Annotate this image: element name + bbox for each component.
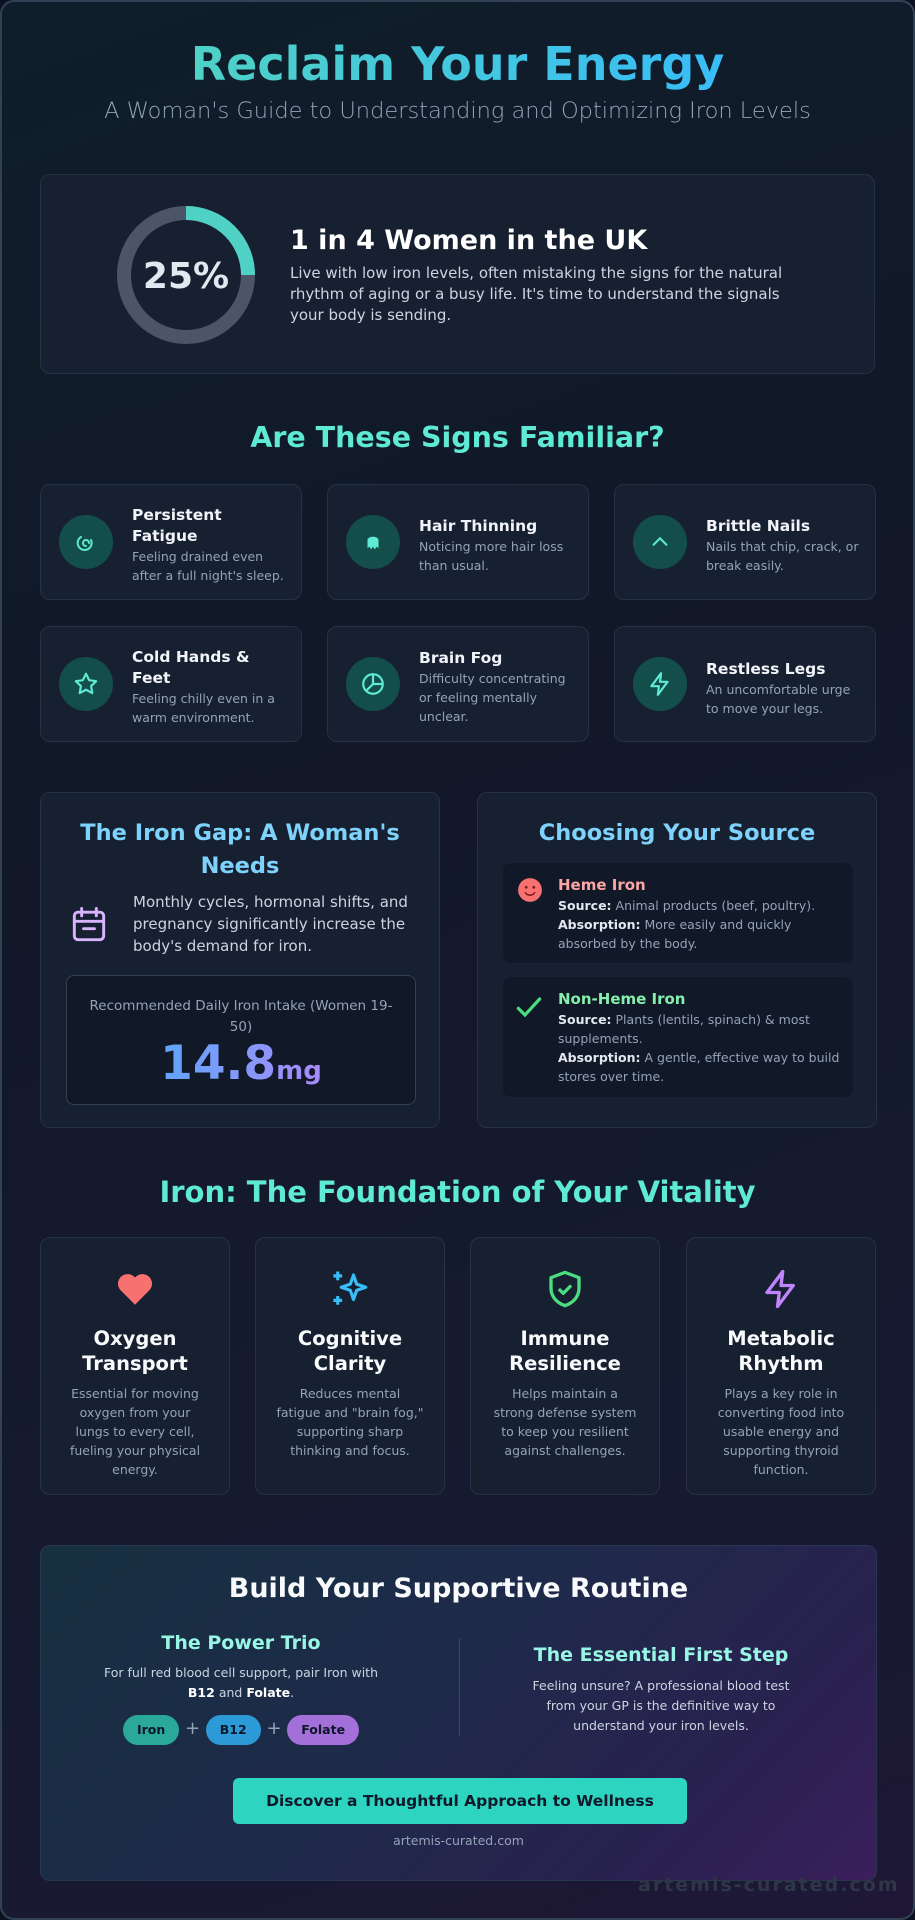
card: immune: Helps maintain a strong defense system to keep you resilient against challenges. xyxy=(494,1386,636,1458)
heme iron: Heme Iron xyxy=(558,876,646,894)
heme iron: Absorption: More easily and quickly absorbed by the body. xyxy=(558,917,791,951)
card: oxygen xyxy=(40,1237,230,1495)
intake box: 14.8mg xyxy=(160,1036,322,1091)
heading: Choosing Your Source xyxy=(539,820,815,846)
stat heading: 1 in 4 Women in the UK xyxy=(290,225,647,256)
sign: legs xyxy=(614,626,876,742)
card: cognitive: Reduces mental fatigue and "brain fog," supporting sharp thinking and focus. xyxy=(276,1386,424,1458)
heading: The Iron Gap: A Woman's Needs xyxy=(80,820,400,879)
pills: B12 xyxy=(220,1722,247,1737)
sign: hair: Hair Thinning xyxy=(419,517,537,535)
icon: bolt xyxy=(765,1270,795,1308)
pills: Iron xyxy=(137,1722,165,1737)
sign: cold: Cold Hands & Feet xyxy=(132,648,250,687)
sign: nails xyxy=(614,484,876,600)
power trio: The Power Trio xyxy=(161,1632,321,1654)
icon: calendar xyxy=(72,907,106,942)
text: Monthly cycles, hormonal shifts, and pregnancy significantly increase the body's demand for iron. xyxy=(133,893,408,955)
essential first step: The Essential First Step xyxy=(534,1644,788,1666)
donut chart xyxy=(117,206,255,344)
sign: cold: Feeling chilly even in a warm environment. xyxy=(132,691,275,725)
sign: fatigue: Feeling drained even after a full night's sleep. xyxy=(132,549,284,583)
card: metabolic: Metabolic Rhythm xyxy=(727,1327,835,1375)
icon: check xyxy=(516,997,542,1018)
heading: signs: Are These Signs Familiar? xyxy=(250,421,665,454)
panel: choosing source xyxy=(477,792,877,1128)
pills: + + xyxy=(185,1718,282,1739)
essential first step xyxy=(533,1644,790,1733)
pills xyxy=(123,1715,359,1745)
pills: Folate xyxy=(301,1722,345,1737)
sign: cold xyxy=(40,626,302,742)
non-heme iron xyxy=(503,977,853,1097)
sign: hair xyxy=(327,484,589,600)
sign: nails: Brittle Nails xyxy=(706,517,810,535)
watermark: artemis-curated.com xyxy=(638,1874,900,1896)
sign: fatigue xyxy=(40,484,302,600)
card: oxygen: Essential for moving oxygen from your lungs to every cell, fueling your physical energy. xyxy=(70,1386,200,1477)
essential first step: Feeling unsure? A professional blood test from your GP is the definitive way to understand your iron levels. xyxy=(533,1678,789,1733)
stat card xyxy=(40,174,875,374)
non-heme iron: Non-Heme Iron xyxy=(558,990,685,1008)
card: metabolic: Plays a key role in converting food into usable energy and supporting thyroid function. xyxy=(718,1386,844,1477)
icon: shield xyxy=(549,1270,581,1308)
sign: nails: Nails that chip, crack, or break easily. xyxy=(706,539,858,573)
intake box xyxy=(66,975,416,1105)
sign: legs: An uncomfortable urge to move your legs. xyxy=(706,682,850,716)
non-heme iron: Source: Plants (lentils, spinach) & most supplements. xyxy=(558,1012,810,1046)
panel: vitality cards xyxy=(40,1237,876,1495)
panel: routine xyxy=(40,1545,877,1881)
power trio: B12 and Folate. xyxy=(188,1685,294,1700)
sign: legs: Restless Legs xyxy=(706,660,825,678)
panel: iron gap xyxy=(40,792,440,1128)
card: metabolic xyxy=(686,1237,876,1495)
icon: heart xyxy=(118,1274,152,1305)
card: cognitive: Cognitive Clarity xyxy=(298,1327,402,1375)
icon: sparkles xyxy=(333,1272,368,1305)
card: immune: Immune Resilience xyxy=(509,1327,621,1375)
sign: brain fog: Brain Fog xyxy=(419,649,502,667)
footer url: artemis-curated.com xyxy=(393,1833,524,1848)
heme iron xyxy=(503,863,853,963)
stat text: Live with low iron levels, often mistaking the signs for the natural rhythm of aging or a busy life. It's time to understand the signals your body is sending. xyxy=(290,264,782,324)
card: immune xyxy=(470,1237,660,1495)
sign: brain fog: Difficulty concentrating or feeling mentally unclear. xyxy=(419,671,566,724)
heme iron: Source: Animal products (beef, poultry). xyxy=(558,898,815,913)
subtitle: A Woman's Guide to Understanding and Optimizing Iron Levels xyxy=(104,98,811,124)
heading: vitality: Iron: The Foundation of Your Vitality xyxy=(159,1175,756,1209)
card: cognitive xyxy=(255,1237,445,1495)
button: Discover a Thoughtful Approach to Wellness xyxy=(266,1792,654,1810)
card: oxygen: Oxygen Transport xyxy=(82,1327,188,1375)
power trio: For full red blood cell support, pair Iron with xyxy=(104,1665,378,1680)
sign: brain fog xyxy=(327,626,589,742)
intake box: Recommended Daily Iron Intake (Women 19-50) xyxy=(90,998,392,1035)
heading: Build Your Supportive Routine xyxy=(229,1573,688,1604)
non-heme iron: Absorption: A gentle, effective way to build stores over time. xyxy=(558,1050,839,1084)
donut chart: 25% xyxy=(143,256,229,297)
button xyxy=(233,1778,687,1824)
panel: signs grid xyxy=(40,484,876,742)
sign: hair: Noticing more hair loss than usual. xyxy=(419,539,563,573)
sign: fatigue: Persistent Fatigue xyxy=(132,506,222,545)
icon: smiley xyxy=(518,878,542,902)
title: Reclaim Your Energy xyxy=(191,37,724,91)
power trio xyxy=(104,1632,378,1745)
